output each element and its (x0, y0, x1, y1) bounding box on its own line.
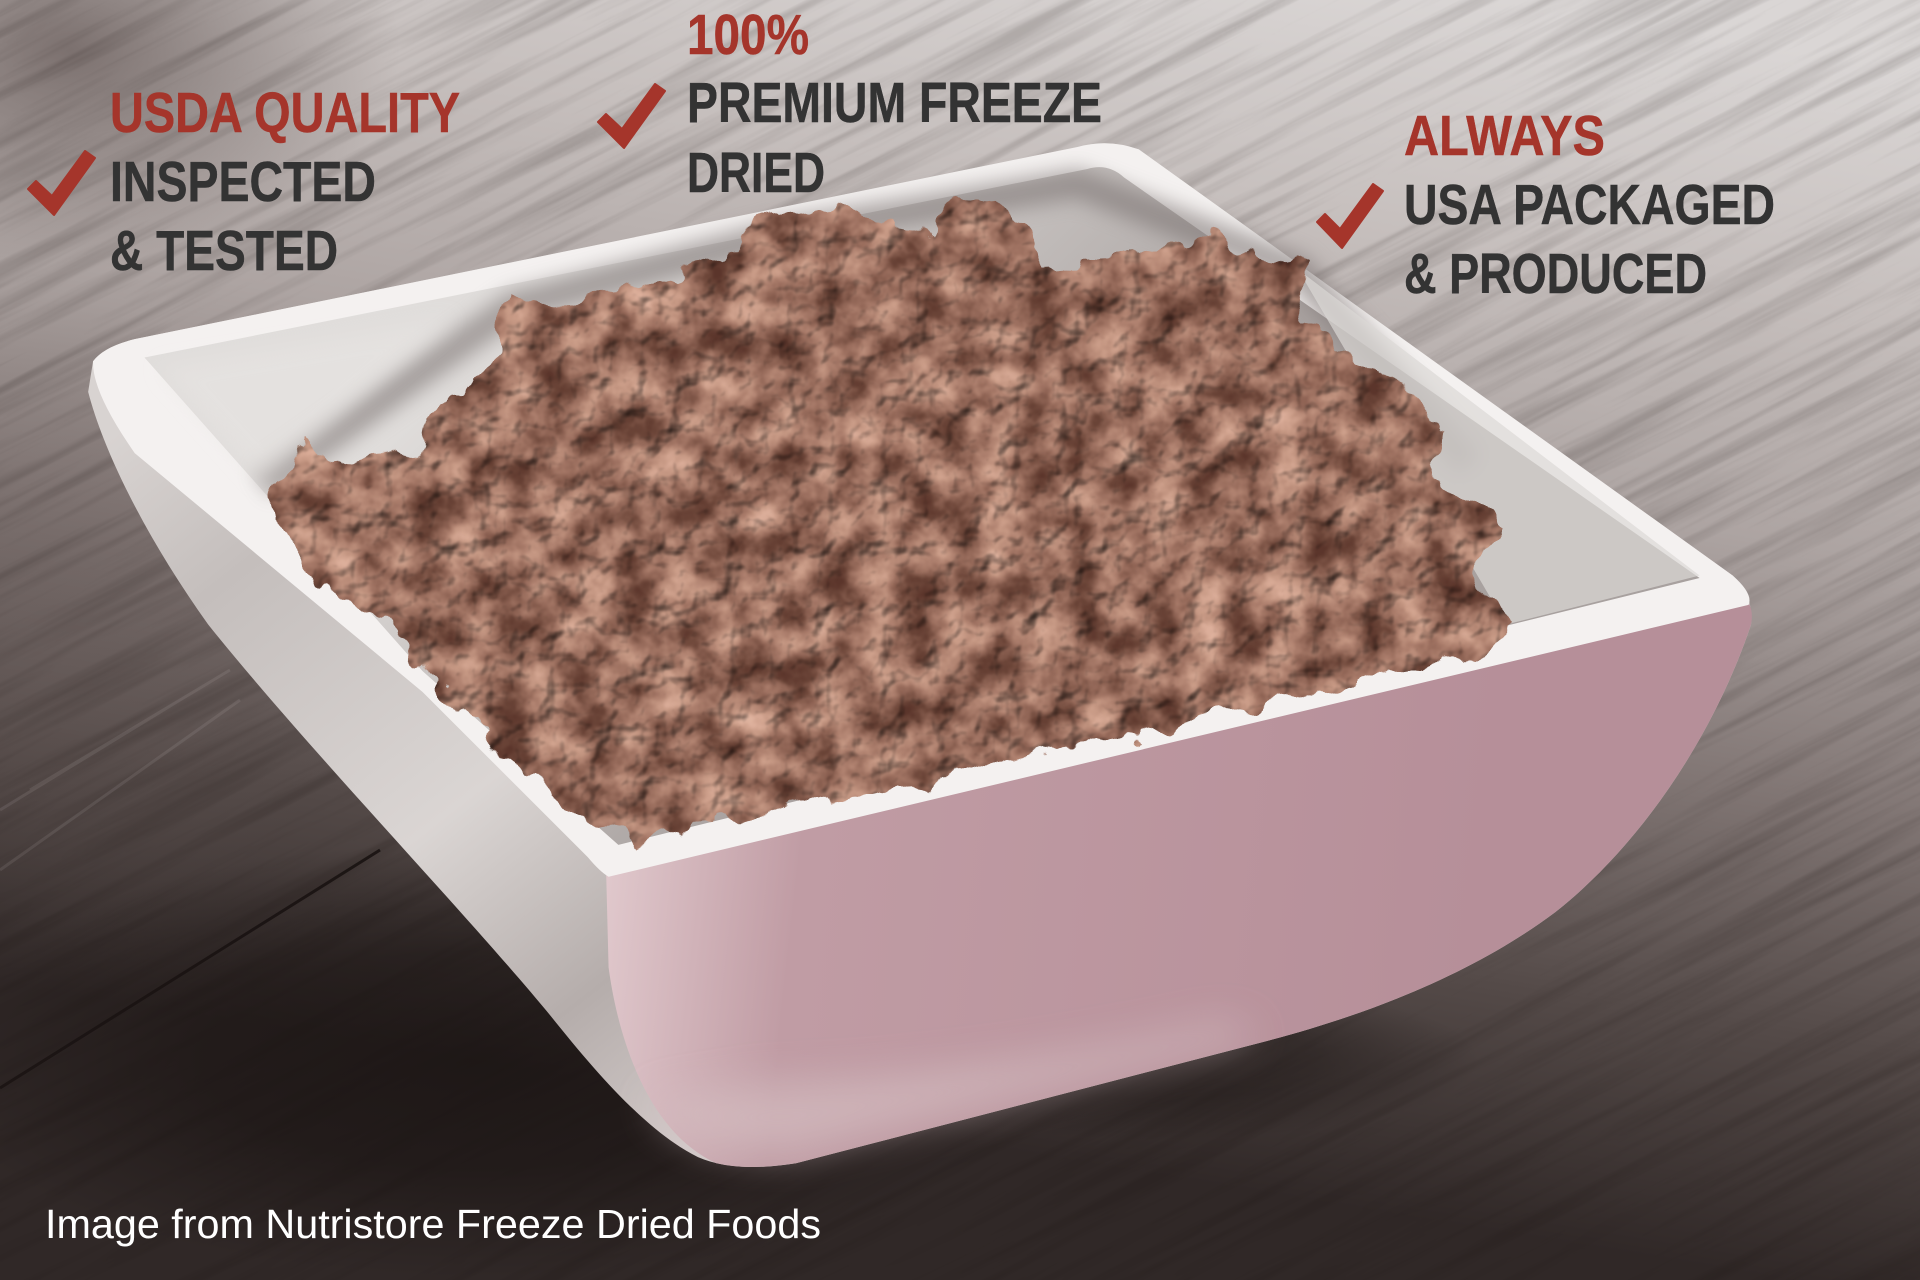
text: inspected: INSPECTED (110, 150, 376, 214)
bowl front face (606, 602, 1752, 1167)
ground meat (269, 196, 1512, 842)
bowl left face (88, 143, 1751, 1167)
text: and produced: & PRODUCED (1404, 242, 1707, 306)
icon: check mark (28, 151, 95, 215)
inner wall shadows (159, 184, 1700, 624)
text: dried: DRIED (687, 141, 825, 205)
text: USA packaged: USA PACKAGED (1404, 173, 1775, 237)
feature: premium freeze dried (598, 3, 1102, 205)
image credit: Image from Nutristore Freeze Dried Foods (45, 1201, 821, 1247)
front face light reflection (649, 1022, 1261, 1152)
feature: always USA (1317, 104, 1775, 306)
text: always: ALWAYS (1404, 104, 1605, 168)
white square bowl with meat (88, 143, 1752, 1167)
text: premium freeze: PREMIUM FREEZE (687, 71, 1102, 135)
feature: USDA quality (28, 81, 460, 283)
bowl shadow (0, 842, 1480, 1278)
text: 100%: 100% (687, 3, 809, 67)
bowl inner walls (144, 167, 1700, 845)
text: and tested: & TESTED (110, 219, 338, 283)
text: USDA quality: USDA QUALITY (110, 81, 460, 145)
icon: check mark (1317, 184, 1383, 248)
bowl rim (93, 143, 1750, 877)
icon: check mark (598, 84, 665, 148)
